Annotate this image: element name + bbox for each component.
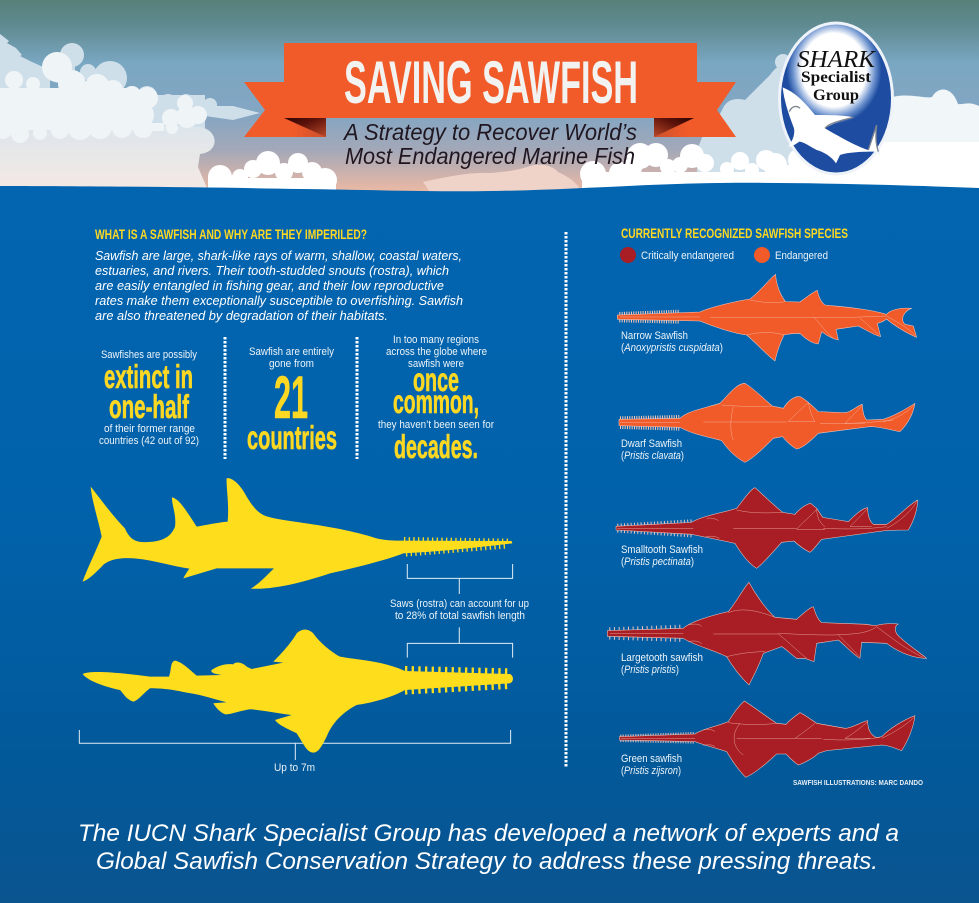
label (621, 753, 682, 777)
heading: what is a sawfish: WHAT IS A SAWFISH AND WHY ARE THEY IMPERILED? (95, 226, 367, 242)
stat: once common: they haven’t been seen for (378, 419, 494, 431)
label (621, 544, 703, 568)
stat: once common (378, 334, 494, 465)
stat: extinct in one-half: one-half (109, 388, 190, 425)
stat: 21 countries: Sawfish are entirely (249, 346, 334, 358)
logo wordmark: Specialist (801, 69, 872, 86)
label: (Anoxypristis cuspidata) (621, 342, 723, 354)
banner panel (284, 43, 697, 118)
clouds: pale centre cloud (423, 165, 582, 192)
subtitle: A Strategy to Recover World’s (342, 119, 637, 145)
yellow sawfish top view (83, 630, 513, 753)
rostra annotation (390, 598, 529, 622)
label (621, 330, 723, 354)
logo: Shark Specialist Group (778, 22, 894, 176)
stat: extinct in one-half: Sawfishes are possibly (101, 349, 197, 361)
legend: Endangered (775, 250, 828, 262)
label: (Pristis pectinata) (621, 556, 694, 568)
intro paragraph: estuaries, and rivers. Their tooth-studded snouts (rostra), which (95, 264, 449, 278)
stat: extinct in one-half: extinct in (104, 358, 193, 395)
illustration credit: SAWFISH ILLUSTRATIONS: MARC DANDO (793, 778, 923, 787)
stat: once common: In too many regions (393, 334, 479, 346)
subtitle (342, 119, 637, 169)
label: Narrow Sawfish (621, 330, 688, 342)
label: Largetooth sawfish (621, 652, 703, 664)
label: (Pristis pristis) (621, 664, 679, 676)
clouds: white foreground puffs centre (208, 151, 337, 192)
stat: once common: common, (393, 383, 479, 420)
stat: once common: across the globe where (386, 346, 487, 358)
heading: species: CURRENTLY RECOGNIZED SAWFISH SPECIES (621, 225, 848, 241)
stat: 21 countries (247, 346, 337, 456)
icon: shark (783, 87, 878, 163)
size diagram (79, 478, 529, 774)
clouds: right bank (580, 54, 979, 192)
stat: extinct in one-half: countries (42 out of 92) (99, 435, 199, 447)
intro paragraph: rates make them exceptionally susceptible to overfishing. Sawfish (95, 294, 463, 308)
ribbon tails (244, 82, 736, 137)
stat: extinct in one-half: of their former range (104, 423, 195, 435)
ocean background (0, 183, 979, 903)
stat: once common: decades. (394, 428, 478, 465)
species: green sawfish (619, 701, 915, 777)
closing statement: The IUCN Shark Specialist Group has developed a network of experts and a (78, 820, 899, 847)
yellow sawfish side view (83, 478, 512, 589)
label: Green sawfish (621, 753, 682, 765)
species: largetooth sawfish (607, 582, 927, 685)
label: Dwarf Sawfish (621, 438, 682, 450)
stat: once common: sawfish were (408, 358, 464, 370)
rostra annotation: to 28% of total sawfish length (395, 610, 525, 622)
title banner (244, 43, 736, 137)
species: smalltooth sawfish (616, 488, 918, 568)
logo wordmark: SHARK (797, 47, 877, 73)
label (621, 438, 684, 462)
intro paragraph: are also threatened by degradation of their habitats. (95, 309, 388, 323)
rostra annotation: Saws (rostra) can account for up (390, 598, 529, 610)
legend (620, 247, 828, 263)
intro paragraph: Sawfish are large, shark-like rays of warm, shallow, coastal waters, (95, 249, 462, 263)
logo wordmark: Group (813, 87, 859, 104)
closing statement (78, 820, 899, 875)
label: Smalltooth Sawfish (621, 544, 703, 556)
stat: 21 countries: gone from (269, 358, 314, 370)
closing statement: Global Sawfish Conservation Strategy to address these pressing threats. (96, 848, 878, 875)
species: dwarf sawfish (619, 383, 915, 462)
stat: 21 countries: countries (247, 419, 337, 456)
stat: 21 countries: 21 (274, 364, 308, 431)
subtitle: Most Endangered Marine Fish (345, 143, 635, 169)
stat: once common: once (413, 361, 459, 398)
label: (Pristis zijsron) (621, 765, 681, 777)
clouds: left bank (0, 34, 260, 188)
logo wordmark (797, 47, 877, 104)
intro paragraph (95, 249, 463, 323)
title: SAVING SAWFISH (344, 49, 638, 116)
stat: extinct in one-half (99, 349, 199, 447)
species: narrow sawfish (617, 274, 917, 361)
legend: Critically endangered (641, 250, 734, 262)
sky background (0, 0, 979, 192)
intro paragraph: are easily entangled in fishing gear, and their low reproductive (95, 279, 444, 293)
label: (Pristis clavata) (621, 450, 684, 462)
label (621, 652, 703, 676)
length annotation: Up to 7m (274, 762, 315, 774)
